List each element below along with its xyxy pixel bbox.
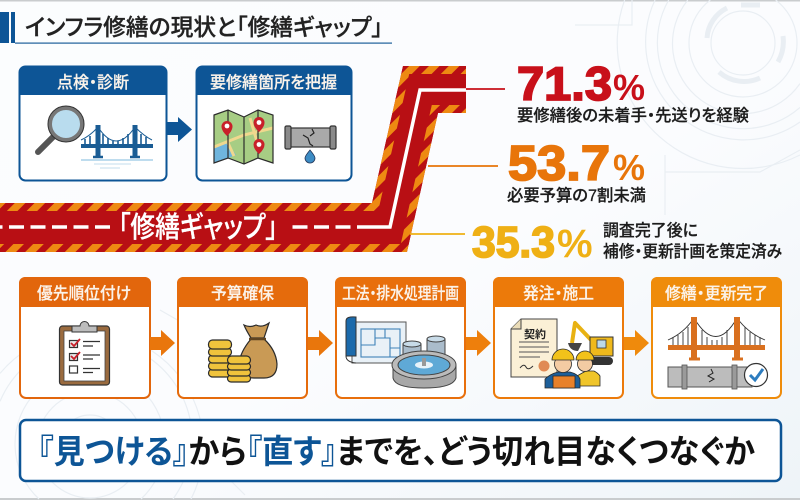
- stat: 53.7%: 53.7: [508, 137, 610, 191]
- panel: inspection and diagnosis: 点検・診断: [57, 73, 129, 92]
- stat: 53.7%: %: [613, 147, 645, 188]
- icon: map with pins: [214, 110, 273, 164]
- panel: construction method: 工法・排水処理計画: [342, 284, 459, 303]
- icon: suspension bridge: [81, 125, 153, 168]
- band label: 「修繕ギャップ」: [118, 211, 278, 244]
- arrow: orange 3: [466, 330, 491, 356]
- icon: orange bridge: [668, 317, 765, 359]
- bottom message: [20, 420, 781, 481]
- icon: contract: 契約: [524, 327, 546, 341]
- panel: prioritization: 優先順位付け: [37, 284, 131, 303]
- stat: 35.3%: 調査完了後に: [603, 221, 698, 240]
- icon: workers: [545, 349, 600, 388]
- stat: 71.3%: 要修繕後の未着手・先送りを経験: [517, 106, 749, 125]
- stat: 71.3%: 71.3: [517, 57, 612, 110]
- icon: magnifying glass: [38, 106, 84, 152]
- icon: money bag and coins: [208, 323, 277, 382]
- arrow: orange 4: [624, 330, 649, 356]
- stat: 53.7%: [507, 137, 646, 205]
- panel: construction method: [335, 277, 466, 398]
- icon: blueprint and water treatment tank: [346, 317, 456, 388]
- panel: inspection and diagnosis: [19, 66, 167, 180]
- stat: 35.3%: [472, 218, 782, 267]
- stat: 35.3%: 補修・更新計画を策定済み: [603, 242, 782, 261]
- connector lines: [410, 89, 505, 234]
- stat: 35.3%: %: [557, 222, 593, 266]
- stat: 71.3%: [517, 57, 749, 125]
- panel: repair complete: [651, 277, 782, 398]
- panel: ordering and construction: 発注・施工: [523, 284, 594, 303]
- stat: 35.3%: 35.3: [472, 218, 555, 267]
- panel: locating repair sites: [196, 66, 352, 180]
- title: インフラ修繕の現状と「修繕ギャップ」: [25, 14, 383, 40]
- icon: cracked pipe: [285, 126, 336, 163]
- panel: repair complete: 修繕・更新完了: [665, 284, 768, 303]
- panel: prioritization: [19, 277, 151, 398]
- arrow: orange 2: [308, 330, 333, 356]
- panel: ordering and construction: [493, 277, 624, 398]
- icon: clipboard checklist: [60, 322, 110, 385]
- panel: budget: [177, 277, 308, 398]
- panel: budget: 予算確保: [211, 284, 274, 303]
- panel: locating repair sites: 要修繕箇所を把握: [210, 73, 337, 92]
- gap band: [0, 66, 466, 252]
- stat: 71.3%: %: [613, 67, 645, 108]
- arrow: orange 1: [150, 330, 175, 356]
- icon: excavator: [568, 323, 613, 365]
- icon: repaired pipe with check: [668, 364, 768, 389]
- stat: 53.7%: 必要予算の7割未満: [507, 186, 646, 205]
- arrow: blue: [167, 117, 192, 142]
- bottom message: 『見つける』から『直す』までを、どう切れ目なくつなぐか: [38, 433, 755, 470]
